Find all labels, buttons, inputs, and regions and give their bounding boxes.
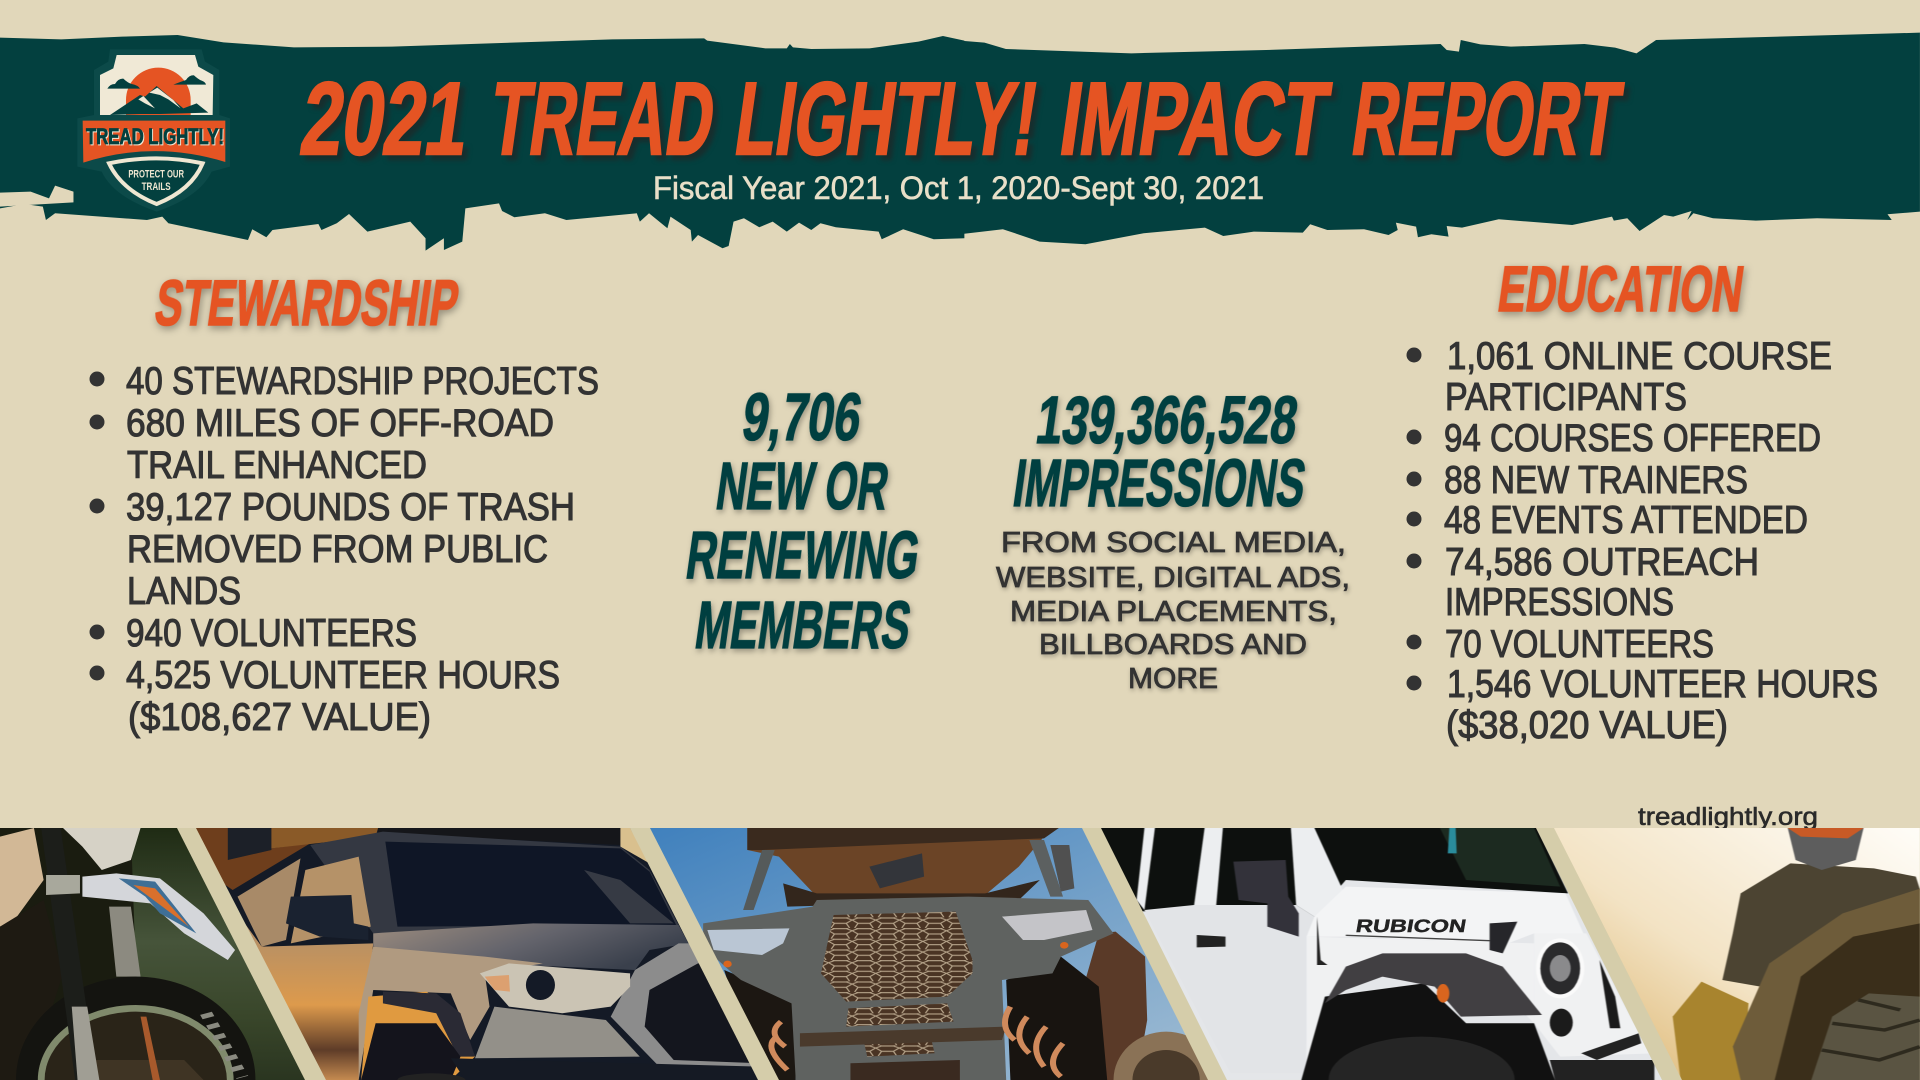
education bullet list: ($38,020 VALUE) bbox=[1446, 704, 1728, 747]
panel: education bbox=[1406, 253, 1878, 747]
photo: dirt bike bbox=[0, 828, 310, 1080]
stat: new or renewing members: MEMBERS bbox=[691, 588, 915, 663]
title: 2021 bbox=[295, 60, 476, 176]
heading: stewardship: STEWARDSHIP bbox=[151, 267, 463, 339]
stewardship bullet list: LANDS bbox=[127, 570, 241, 613]
photo: atv rider bbox=[1550, 828, 1920, 1080]
heading: education: EDUCATION bbox=[1494, 253, 1748, 325]
impressions description: WEBSITE, DIGITAL ADS, bbox=[996, 562, 1350, 594]
stewardship bullet list bbox=[90, 360, 599, 739]
stat: impressions: IMPRESSIONS bbox=[1009, 446, 1310, 521]
logo: Tread Lightly badge bbox=[77, 49, 230, 212]
panel: stewardship bbox=[90, 267, 599, 739]
title: TREAD bbox=[484, 60, 722, 176]
logo: Tread Lightly badge: TRAILS bbox=[142, 181, 171, 193]
stewardship bullet list: ($108,627 VALUE) bbox=[128, 696, 431, 739]
stewardship bullet list: REMOVED FROM PUBLIC bbox=[127, 528, 548, 571]
education bullet list: 94 COURSES OFFERED bbox=[1444, 417, 1821, 460]
impressions description: MEDIA PLACEMENTS, bbox=[1010, 596, 1337, 628]
photo: white jeep rubicon bbox=[1100, 828, 1675, 1080]
education bullet list bbox=[1406, 335, 1878, 747]
stewardship bullet list: TRAIL ENHANCED bbox=[127, 444, 427, 487]
education bullet list: 70 VOLUNTEERS bbox=[1445, 623, 1714, 666]
photo strip bbox=[0, 828, 1920, 1080]
stat: impressions: 139,366,528 bbox=[1032, 383, 1302, 458]
education bullet list: 48 EVENTS ATTENDED bbox=[1444, 499, 1808, 542]
stewardship bullet list: 680 MILES OF OFF-ROAD bbox=[126, 402, 554, 445]
stewardship bullet list: 39,127 POUNDS OF TRASH bbox=[126, 486, 575, 529]
photo: pickup truck bbox=[184, 828, 760, 1080]
title bbox=[295, 60, 1628, 176]
education bullet list: 74,586 OUTREACH bbox=[1445, 541, 1759, 584]
impressions description: MORE bbox=[1128, 663, 1218, 695]
subtitle: fiscal year: Fiscal Year 2021, Oct 1, 2020-Sept 30, 2021 bbox=[653, 170, 1264, 206]
photo: utv front bbox=[640, 828, 1238, 1080]
logo: Tread Lightly badge: PROTECT OUR bbox=[128, 168, 184, 180]
education bullet list: 1,061 ONLINE COURSE bbox=[1447, 335, 1832, 378]
education bullet list: PARTICIPANTS bbox=[1445, 376, 1687, 419]
education bullet list: 88 NEW TRAINERS bbox=[1444, 459, 1748, 502]
stat: impressions bbox=[996, 383, 1350, 695]
stat: new or renewing members bbox=[682, 380, 924, 663]
stat: new or renewing members: RENEWING bbox=[682, 518, 924, 593]
stat: new or renewing members: 9,706 bbox=[738, 380, 866, 455]
stat: new or renewing members: NEW OR bbox=[712, 449, 893, 524]
title: LIGHTLY! bbox=[729, 60, 1045, 176]
impressions description bbox=[996, 527, 1350, 695]
impressions description: BILLBOARDS AND bbox=[1039, 629, 1307, 661]
torn header band bbox=[0, 33, 1920, 251]
stewardship bullet list: 40 STEWARDSHIP PROJECTS bbox=[126, 360, 599, 403]
logo: Tread Lightly badge: TREAD LIGHTLY! bbox=[87, 125, 225, 150]
title: IMPACT bbox=[1054, 60, 1336, 176]
education bullet list: IMPRESSIONS bbox=[1445, 581, 1674, 624]
jeep badge: RUBICON bbox=[1354, 916, 1468, 936]
title: REPORT bbox=[1346, 60, 1628, 176]
stewardship bullet list: 4,525 VOLUNTEER HOURS bbox=[126, 654, 560, 697]
stewardship bullet list: 940 VOLUNTEERS bbox=[126, 612, 417, 655]
impressions description: FROM SOCIAL MEDIA, bbox=[1001, 527, 1346, 559]
logo: Tread Lightly badge: TREAD LIGHTLY! bbox=[86, 124, 224, 149]
website url: treadlightly.org bbox=[1638, 803, 1818, 831]
